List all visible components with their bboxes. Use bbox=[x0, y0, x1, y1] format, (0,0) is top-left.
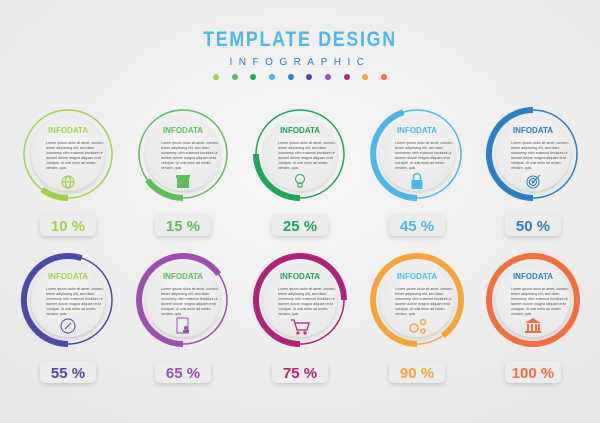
percent 90 bbox=[389, 361, 445, 383]
item 8: 75% bbox=[256, 256, 344, 344]
item 7: 65%: INFODATA bbox=[163, 272, 203, 281]
percent 65 bbox=[155, 361, 211, 383]
item 9: 90% bbox=[373, 256, 461, 344]
item 3: 25% bbox=[256, 110, 344, 198]
item 5: 50% bbox=[489, 110, 577, 198]
icon: bank bbox=[525, 318, 541, 333]
item 8: 75%: INFODATA bbox=[280, 272, 320, 281]
percent 55: 55 % bbox=[51, 365, 85, 382]
percent 100 bbox=[505, 361, 561, 383]
percent 15 bbox=[155, 214, 211, 236]
title: TEMPLATE DESIGN bbox=[203, 28, 397, 51]
item 2: 15% bbox=[139, 110, 227, 198]
item 2: 15%: INFODATA bbox=[163, 126, 203, 135]
icon: gears bbox=[410, 320, 426, 333]
icon: target bbox=[527, 175, 540, 188]
percent 100: 100 % bbox=[512, 365, 554, 382]
item 10: 100% bbox=[489, 256, 577, 344]
item 4: 45%: INFODATA bbox=[397, 126, 437, 135]
subtitle: INFOGRAPHIC bbox=[230, 57, 370, 68]
item 10: 100%: INFODATA bbox=[513, 272, 553, 281]
icon: lock bbox=[412, 174, 422, 189]
item 1: 10%: INFODATA bbox=[48, 126, 88, 135]
percent 75 bbox=[272, 361, 328, 383]
item 3: 25%: INFODATA bbox=[280, 126, 320, 135]
item 1: 10% bbox=[24, 110, 112, 198]
color dots bbox=[213, 74, 387, 80]
percent 50 bbox=[505, 214, 561, 236]
percent 50: 50 % bbox=[516, 218, 550, 235]
percent 10 bbox=[40, 214, 96, 236]
item 5: 50%: INFODATA bbox=[513, 126, 553, 135]
percent 25 bbox=[272, 214, 328, 236]
percent 10: 10 % bbox=[51, 218, 85, 235]
item 9: 90%: INFODATA bbox=[397, 272, 437, 281]
percent 25: 25 % bbox=[283, 218, 317, 235]
percent 90: 90 % bbox=[400, 365, 434, 382]
percent 45 bbox=[389, 214, 445, 236]
percent 75: 75 % bbox=[283, 365, 317, 382]
percent 55 bbox=[40, 361, 96, 383]
icon: compass bbox=[61, 319, 75, 333]
item 4: 45% bbox=[373, 110, 461, 198]
percent 45: 45 % bbox=[400, 218, 434, 235]
item 7: 65% bbox=[139, 256, 227, 344]
item 6: 55% bbox=[24, 256, 112, 344]
icon: cart bbox=[291, 320, 309, 334]
item 6: 55%: INFODATA bbox=[48, 272, 88, 281]
icon: gift bbox=[176, 175, 190, 188]
percent 65: 65 % bbox=[166, 365, 200, 382]
icon: document bbox=[177, 318, 189, 333]
icon: globe bbox=[62, 176, 74, 188]
icon: bulb bbox=[296, 174, 304, 187]
percent 15: 15 % bbox=[166, 218, 200, 235]
